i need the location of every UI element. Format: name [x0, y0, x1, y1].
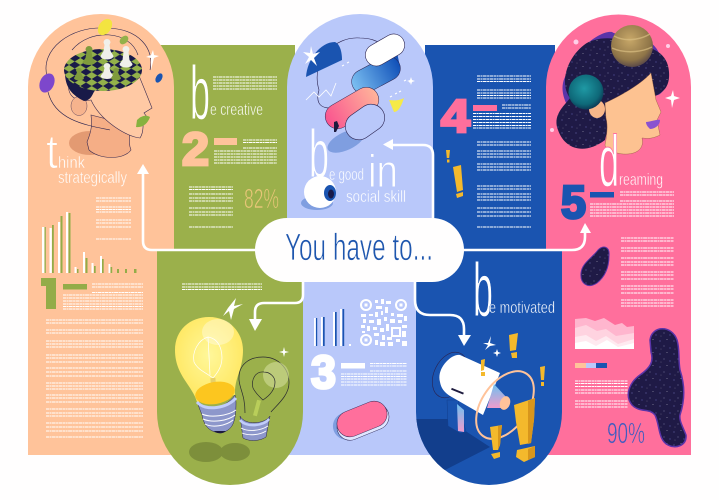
- dash: [473, 105, 497, 111]
- text block: [63, 284, 143, 309]
- heading: dreaming: reaming: [619, 170, 663, 189]
- heading: be good in social skill: b: [309, 116, 329, 192]
- legend bar: [575, 363, 607, 368]
- text block: [575, 381, 628, 407]
- bar chart: [42, 212, 136, 273]
- text block: [46, 320, 143, 437]
- heading: be motivated: b: [473, 248, 493, 333]
- icon: light bulbs: [175, 298, 289, 462]
- panel: be good in social skill: [301, 30, 415, 444]
- number 1: [41, 278, 56, 309]
- dash: [214, 138, 237, 145]
- heading: be motivated: e motivated: [489, 298, 555, 317]
- number 3: 3: [311, 346, 336, 398]
- arrow: to think strategically: [137, 164, 260, 250]
- text block: [182, 284, 262, 290]
- heading: be motivated: [473, 248, 555, 333]
- arrow: to be creative bulbs: [249, 278, 303, 331]
- heading: be good in social skill: in: [368, 145, 398, 197]
- bar chart: [314, 309, 351, 346]
- text block: [477, 76, 531, 98]
- number 4: 4: [441, 90, 470, 142]
- text block: [590, 192, 674, 216]
- panel: be creative: [175, 51, 289, 462]
- heading: think strategically: hink: [58, 153, 85, 172]
- heading: think strategically: t: [46, 126, 58, 179]
- icon: speech bubbles: [303, 30, 415, 158]
- number 5: 5: [561, 176, 586, 228]
- icon: chess head: [36, 16, 164, 158]
- icon: cosmic hair head: [550, 25, 680, 154]
- QR code: [361, 299, 407, 346]
- panel: dreaming: [550, 25, 686, 450]
- heading: be good in social skill: social skill: [346, 187, 406, 206]
- dash: [63, 284, 87, 290]
- icon: small cosmic blob: [581, 247, 609, 286]
- heading: be creative: e creative: [210, 100, 263, 119]
- arrow: to social skill: [383, 139, 433, 222]
- text block: [473, 105, 531, 128]
- callout title: You have to...: [285, 227, 433, 269]
- heading: be creative: b: [190, 51, 210, 136]
- icon: pink pill button: [329, 397, 393, 444]
- panel: think strategically: [36, 16, 164, 437]
- heading: dreaming: [599, 122, 663, 202]
- heading: think strategically: strategically: [58, 168, 127, 187]
- number 2: 2: [182, 123, 209, 175]
- heading: think strategically: [46, 126, 127, 187]
- icon: megaphone: [416, 333, 545, 470]
- text block: [341, 364, 407, 385]
- heading: dreaming: d: [599, 122, 619, 202]
- panel: be motivated lower: [416, 261, 554, 470]
- heading: be good in social skill: e good: [329, 165, 364, 184]
- icon: exclamation marks: [446, 150, 463, 198]
- area chart: [575, 318, 634, 349]
- text block: [96, 198, 131, 239]
- callout: you have to: [255, 218, 464, 282]
- arrow: to motivated: [415, 278, 471, 346]
- heading: be creative: [190, 51, 263, 136]
- stat 90%: 90%: [607, 418, 645, 450]
- text block: [189, 187, 233, 227]
- icon: large cosmic blob: [628, 329, 686, 447]
- text block: [214, 140, 277, 163]
- arrow: to dreaming: [460, 223, 591, 250]
- stat 82%: 82%: [244, 183, 279, 214]
- dash: [341, 363, 365, 368]
- text block: [213, 77, 277, 89]
- dash: [590, 192, 614, 198]
- panel: be motivated upper: [441, 76, 531, 227]
- text block: [621, 238, 674, 306]
- icon: eyeball: [301, 176, 336, 210]
- text block: [477, 142, 531, 227]
- heading: be good in social skill: [309, 116, 406, 206]
